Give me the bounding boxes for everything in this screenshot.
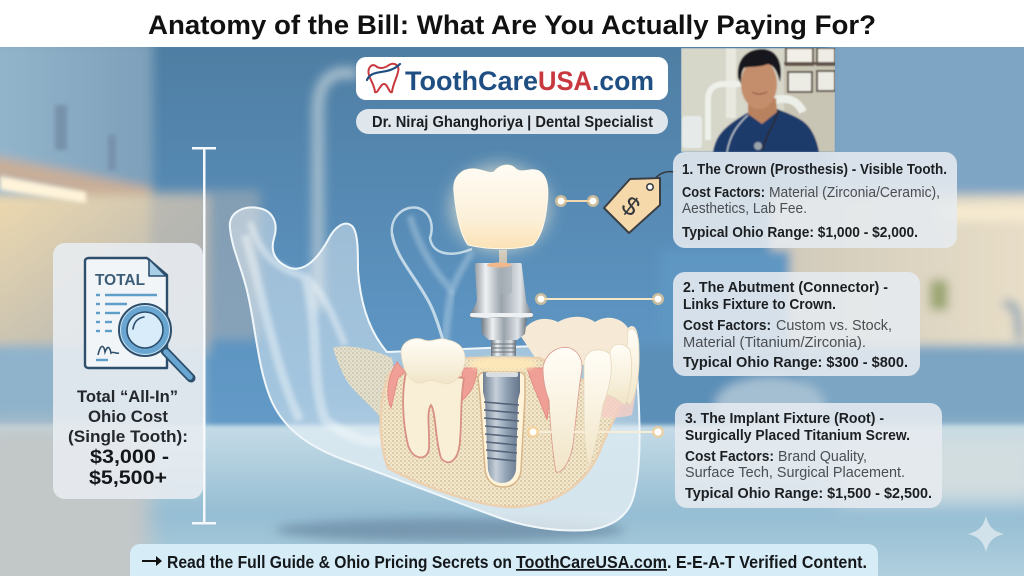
total cost value [89,447,169,489]
panel: the implant fixture: Surgically Placed Titanium Screw. [685,427,910,444]
crown glow [450,164,550,252]
icon: bill with magnifier: TOTAL [95,272,145,289]
specialist name pill: Dr. Niraj Ghanghoriya | Dental Specialist [372,114,653,131]
total cost label [68,388,188,446]
logo wordmark: .com [592,66,654,96]
front teeth row [543,329,639,472]
logo wordmark: ToothCare [405,66,538,96]
panel: the crown: Typical Ohio Range: $1,000 - $2,000. [682,224,918,241]
panel: the crown: Aesthetics, Lab Fee. [682,201,807,217]
panel: the crown: Material (Zirconia/Ceramic), [769,185,940,201]
panel: the abutment: Material (Titanium/Zirconia). [683,335,866,351]
transparent jaw shell [230,207,639,530]
icon: price tag [604,172,675,233]
bracket: full implant height [192,147,216,524]
call to action banner [130,544,878,576]
total cost label: Total “All-In” [77,388,178,406]
call to action banner: ToothCareUSA.com [516,552,667,572]
far side jaw ramus [392,208,472,350]
panel: the abutment: Custom vs. Stock, [776,318,892,334]
logo panel [356,57,668,100]
callout line: abutment [535,293,664,305]
total cost label: Ohio Cost [88,408,169,426]
left bone stub [333,346,396,420]
implant glow [469,357,537,371]
floating crown [454,165,548,249]
panel: the abutment: 2. The Abutment (Connector) - [683,279,888,296]
panel: the crown [673,152,957,248]
logo wordmark: USA [538,66,592,96]
gum line behind front teeth [582,392,636,420]
total cost value: $5,500+ [89,468,167,489]
callout line: crown [555,195,599,207]
panel: the implant fixture: Cost Factors: [685,449,774,465]
panel: the implant fixture: Typical Ohio Range: $1,500 - $2,500. [685,485,932,502]
bone cross-section [381,358,625,507]
title bar [0,0,1024,47]
gum tissue [388,362,548,420]
doctor photo [681,48,835,152]
panel: the implant fixture: Brand Quality, [778,449,867,465]
panel: the crown: Cost Factors: [682,185,765,201]
panel: the abutment: Typical Ohio Range: $300 - $800. [683,354,908,371]
panel: the implant fixture: 3. The Implant Fixture (Root) - [685,410,884,427]
jaw inner translucent folds [245,222,385,441]
icon: price tag: $ [616,190,646,223]
jaw model illustration [230,164,639,530]
title text: Anatomy of the Bill: What Are You Actually Paying For? [148,10,876,40]
icon: bill with magnifier [85,258,191,378]
panel: the implant fixture [675,403,942,508]
back row of teeth [520,317,638,365]
floor shadow under jaw [275,518,625,542]
call to action banner: Read the Full Guide & Ohio Pricing Secrets on [167,552,512,572]
arrow [142,556,162,566]
panel: the implant fixture: Surface Tech, Surgical Placement. [685,465,905,481]
total cost label: (Single Tooth): [68,428,188,446]
panel: the abutment: Cost Factors: [683,318,771,334]
panel: the abutment [673,272,920,376]
icon: tooth logo [367,64,400,92]
panel: the crown: 1. The Crown (Prosthesis) - Visible Tooth. [682,161,947,178]
icon: sparkle [968,516,1004,552]
panel: total cost [53,243,203,499]
implant fixture: titanium screw [478,372,525,487]
callout line: fixture [527,426,664,438]
natural molar with roots [401,338,465,462]
logo wordmark [405,66,654,96]
call to action banner: . E-E-A-T Verified Content. [667,552,867,572]
panel: the abutment: Links Fixture to Crown. [683,296,836,313]
abutment connector [470,250,533,356]
total cost value: $3,000 - [90,447,169,468]
specialist name pill [356,109,668,134]
